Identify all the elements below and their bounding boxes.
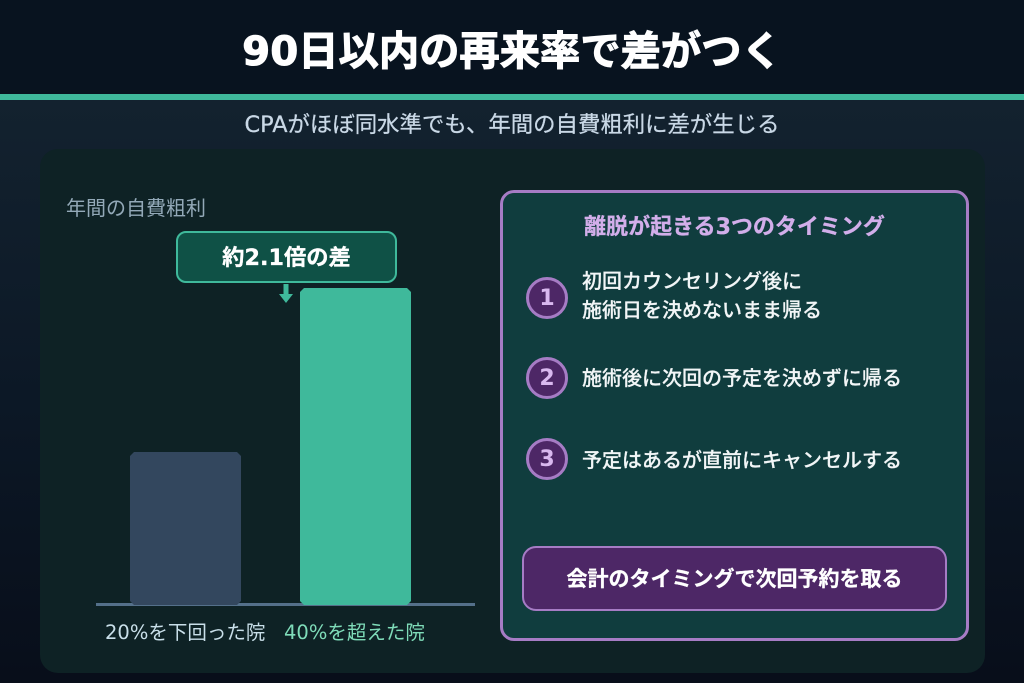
badge 2: 2: [539, 366, 555, 391]
header band: [0, 0, 1024, 94]
badge 1: 1: [539, 286, 555, 311]
callout: 2.1x difference: [176, 231, 397, 283]
axis baseline: [96, 603, 475, 606]
item 3 text: 予定はあるが直前にキャンセルする: [582, 448, 902, 472]
bar label: over 40%: 40%を超えた院: [284, 621, 425, 644]
badge 3: [526, 438, 568, 480]
callout: 2.1x difference: 約2.1倍の差: [222, 245, 351, 271]
item 1 text: 施術日を決めないまま帰る: [582, 298, 822, 322]
bar label: under 20%: 20%を下回った院: [105, 621, 265, 644]
call to action: [522, 546, 947, 611]
subtitle: CPAがほぼ同水準でも、年間の自費粗利に差が生じる: [245, 112, 779, 138]
panel: churn timings: [500, 190, 969, 641]
item 1: [526, 269, 822, 322]
item 2 text: 施術後に次回の予定を決めずに帰る: [582, 366, 902, 390]
item 1 text: 初回カウンセリング後に: [582, 269, 802, 293]
call to action: 会計のタイミングで次回予約を取る: [566, 567, 902, 591]
item 1 text: [582, 269, 822, 322]
accent rule: [0, 94, 1024, 100]
item 3: [526, 438, 902, 480]
chart: annual gross profit comparison: [66, 196, 475, 644]
main panel: [40, 149, 985, 673]
chart label: 年間の自費粗利: [66, 196, 206, 220]
badge 2: [526, 357, 568, 399]
panel heading: 離脱が起きる3つのタイミング: [584, 215, 885, 240]
bar: over 40% clinics: [300, 288, 411, 605]
title: 90日以内の再来率で差がつく: [242, 28, 782, 75]
bar: under 20% clinics: [130, 452, 241, 605]
badge 1: [526, 277, 568, 319]
item 2: [526, 357, 902, 399]
badge 3: 3: [539, 447, 555, 472]
arrow: callout to bar: [279, 284, 293, 303]
